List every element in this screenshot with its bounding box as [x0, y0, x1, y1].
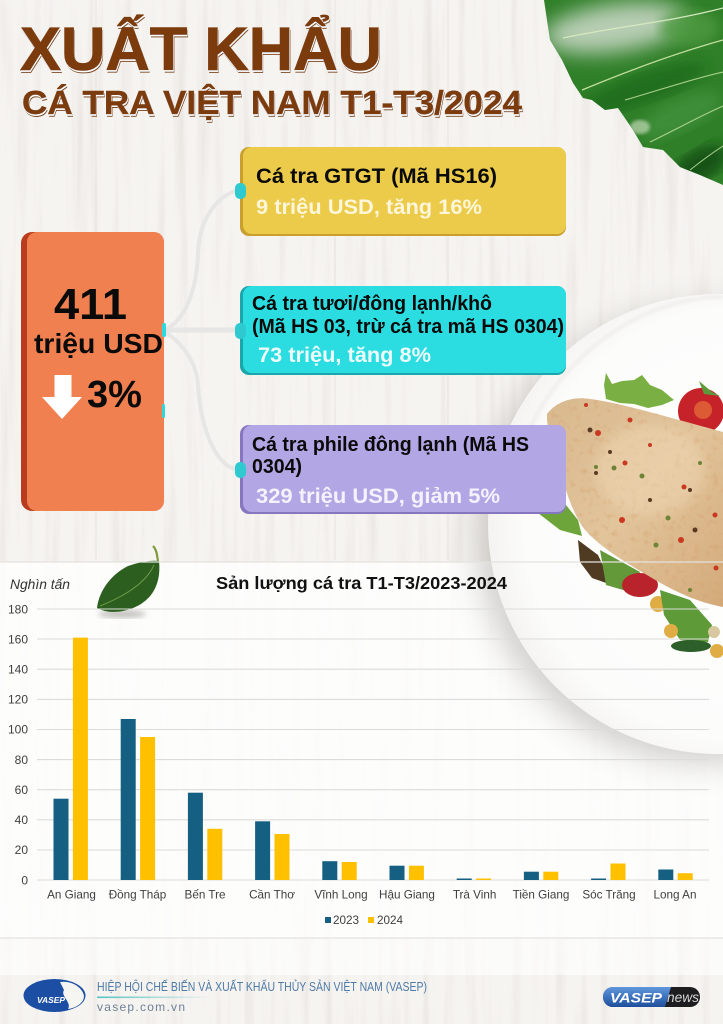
panel: fresh frozen dried pangasius — [235, 286, 566, 375]
panel: frozen fillet pangasius: Cá tra phile đông lạnh (Mã HS — [252, 433, 529, 456]
footer band — [0, 938, 723, 975]
subtitle: CÁ TRA VIỆT NAM T1-T3/2024 — [22, 84, 523, 121]
website: vasep.com.vn — [97, 1000, 185, 1014]
icon: connector node — [235, 183, 246, 199]
total value: 411 — [54, 280, 127, 329]
badge: VASEP news — [603, 987, 700, 1007]
x axis labels: Bến Tre — [185, 888, 225, 902]
x axis labels — [47, 888, 696, 902]
x axis labels: Long An — [654, 888, 696, 902]
legend: 2024 — [377, 914, 404, 927]
title: XUẤT KHẨU — [20, 15, 382, 83]
panel: fresh frozen dried pangasius: (Mã HS 03, trừ cá tra mã HS 0304) — [252, 315, 564, 338]
panel: value-added pangasius — [235, 147, 566, 236]
panel: frozen fillet pangasius — [235, 425, 566, 514]
y axis labels: 180 — [8, 602, 28, 616]
fish fillet — [540, 395, 723, 610]
badge: VASEP news: news — [667, 990, 699, 1005]
leaf top right — [540, 0, 723, 193]
vegetables bottom — [538, 505, 723, 658]
y axis labels: 20 — [15, 843, 28, 857]
panel: fresh frozen dried pangasius: Cá tra tươi/đông lạnh/khô — [252, 292, 492, 315]
x axis labels: An Giang — [47, 888, 96, 902]
icon: down arrow — [42, 375, 82, 419]
chart title: Sản lượng cá tra T1-T3/2023-2024 — [216, 573, 507, 593]
icon: VASEP logo — [24, 979, 86, 1012]
x axis labels: Tiền Giang — [513, 888, 569, 902]
icon: connector node — [235, 323, 246, 339]
icon: VASEP logo: VASEP — [37, 995, 65, 1005]
panel: frozen fillet pangasius: 0304) — [252, 455, 302, 478]
bar chart — [0, 562, 723, 938]
total unit: triệu USD — [34, 328, 163, 359]
x axis labels: Đồng Tháp — [109, 888, 167, 902]
connectors — [165, 190, 240, 470]
x axis labels: Sóc Trăng — [582, 888, 636, 902]
change percent: 3% — [87, 374, 142, 416]
x axis labels: Hậu Giang — [379, 888, 435, 902]
plate — [477, 294, 723, 763]
organisation name: HIỆP HỘI CHẾ BIẾN VÀ XUẤT KHẨU THỦY SẢN VIỆT NAM (VASEP) — [97, 979, 427, 994]
tomato right — [678, 381, 723, 434]
panel: frozen fillet pangasius: 329 triệu USD, giảm 5% — [256, 484, 500, 508]
y axis unit: Nghìn tấn — [10, 577, 70, 592]
panel: value-added pangasius: Cá tra GTGT (Mã HS16) — [256, 164, 497, 188]
y axis labels: 0 — [21, 874, 28, 888]
x axis labels: Trà Vinh — [453, 888, 496, 902]
panel: fresh frozen dried pangasius: 73 triệu, tăng 8% — [258, 343, 431, 367]
legend — [325, 914, 404, 927]
chart background panel — [0, 562, 723, 938]
x axis labels: Vĩnh Long — [314, 888, 368, 902]
legend: 2023 — [333, 914, 359, 927]
y axis labels: 120 — [8, 692, 28, 706]
badge: VASEP news: VASEP — [610, 990, 663, 1006]
y axis labels: 80 — [15, 753, 28, 767]
y axis labels: 160 — [8, 632, 28, 646]
panel: value-added pangasius: 9 triệu USD, tăng 16% — [256, 195, 482, 219]
panel: total export — [21, 232, 166, 511]
y axis labels: 40 — [15, 813, 28, 827]
footer — [24, 979, 700, 1014]
lettuce top — [604, 373, 674, 408]
bars 2024 — [73, 638, 693, 880]
x axis labels: Cần Thơ — [249, 888, 295, 902]
y axis labels: 60 — [15, 783, 28, 797]
y axis labels — [8, 602, 28, 888]
y axis labels: 100 — [8, 722, 28, 736]
small leaf decoration — [97, 546, 159, 618]
food on plate — [538, 373, 723, 658]
y axis labels: 140 — [8, 662, 28, 676]
icon: connector node — [235, 462, 246, 478]
bars 2023 — [54, 719, 673, 880]
